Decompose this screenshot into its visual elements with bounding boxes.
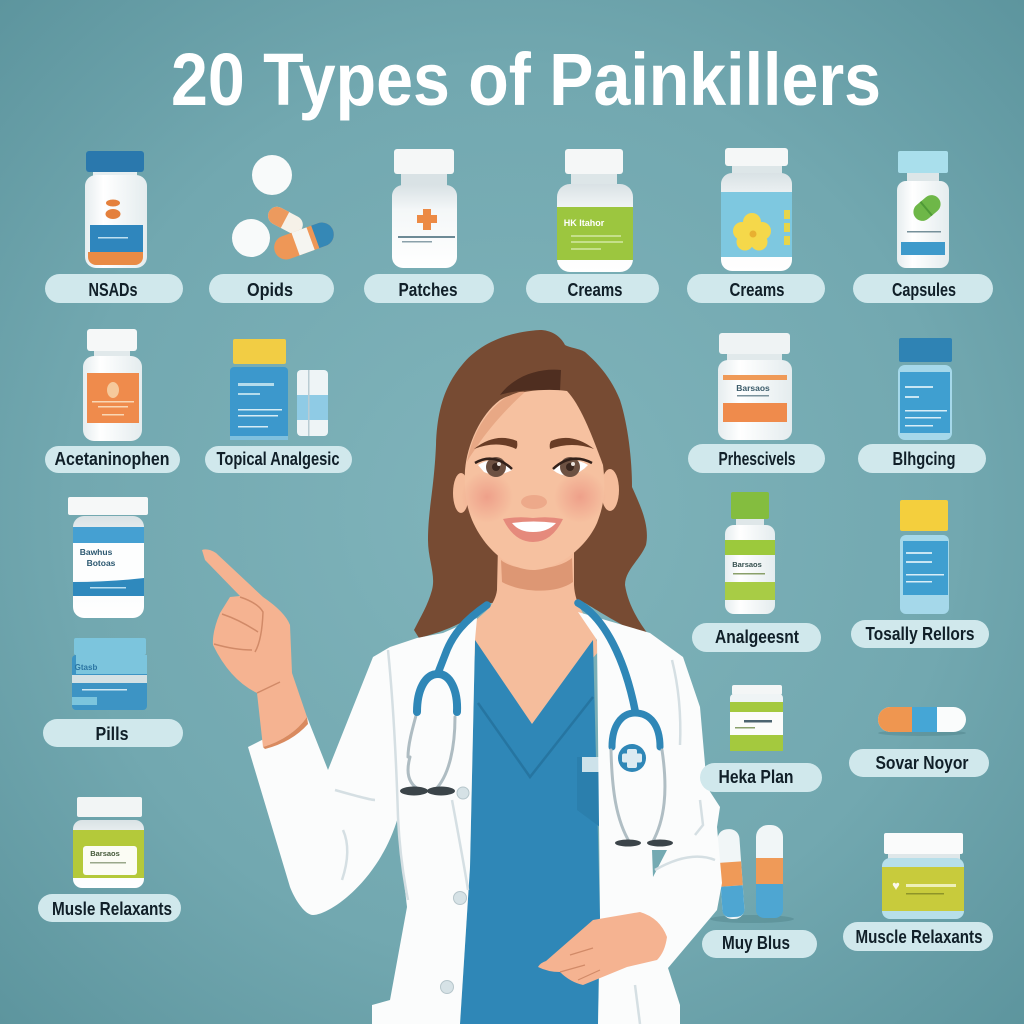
label: Topical Analgesic: Topical Analgesic xyxy=(216,449,340,469)
item: patches bottle xyxy=(392,149,457,268)
label: NSADs: NSADs xyxy=(88,280,138,300)
doctor lower hand xyxy=(538,912,667,985)
label: Analgeesnt: Analgeesnt xyxy=(715,627,799,647)
label: Sovar Noyor: Sovar Noyor xyxy=(876,753,968,773)
item: cream bottle flower xyxy=(721,148,792,271)
item: prescription bottle xyxy=(718,333,792,440)
item: cream bottle green xyxy=(557,149,633,272)
item: green cap bottle xyxy=(725,492,775,614)
item: large white-blue bottle: Bawhus xyxy=(80,547,113,557)
label: Creams 2: Creams xyxy=(730,280,784,300)
label: Pills xyxy=(43,719,183,747)
label: Sovar Noyor xyxy=(849,749,989,777)
label: Acetaminophen xyxy=(45,446,180,473)
item: muscle relaxant jar right: ♥ xyxy=(892,878,900,893)
stethoscope badge xyxy=(618,744,646,772)
coat folds xyxy=(335,650,715,1024)
stethoscope chest pieces xyxy=(400,786,673,846)
doctor forehead shadow xyxy=(467,392,525,462)
label: Creams 1 xyxy=(526,274,659,303)
doctor coat left xyxy=(248,618,477,1024)
label: Musle Relaxants left xyxy=(38,894,181,922)
label: Prhescivels: Prhescivels xyxy=(718,449,796,469)
illustration: doctor xyxy=(202,330,722,1024)
doctor scrub pocket xyxy=(577,757,600,827)
doctor nose xyxy=(521,495,547,509)
item: large white-blue bottle: Botoas xyxy=(87,558,116,568)
item: small green jar xyxy=(730,685,783,751)
doctor mouth xyxy=(503,517,563,542)
doctor ears xyxy=(453,469,619,513)
label: Patches: Patches xyxy=(398,280,458,300)
label: Topical Analgesic xyxy=(205,446,352,473)
label: Pills: Pills xyxy=(96,724,128,744)
item: capsule bottle xyxy=(897,151,949,268)
item: small vials xyxy=(710,825,794,923)
label: Heka Plan xyxy=(700,763,822,792)
item: muscle relaxant jar right xyxy=(882,833,964,919)
doctor hair part shadow xyxy=(500,370,561,395)
label: Blhgcing: Blhgcing xyxy=(892,449,956,469)
doctor cheeks xyxy=(461,471,606,523)
doctor buttons xyxy=(440,787,469,994)
item: blue cap bottle xyxy=(898,338,952,440)
label: Patches xyxy=(364,274,494,303)
item: pills jar xyxy=(72,638,147,710)
label: Analgeesnt xyxy=(692,623,821,652)
label: Acetaminophen: Acetaninophen xyxy=(54,449,170,469)
label: Opids: Opids xyxy=(247,280,293,300)
label: Muy Blus: Muy Blus xyxy=(722,933,790,953)
label: Opids xyxy=(209,274,334,303)
item: large white-blue bottle xyxy=(68,497,148,618)
coat gap xyxy=(652,850,667,877)
label: Prhescivels xyxy=(688,444,825,473)
doctor collar seam xyxy=(478,697,593,777)
doctor raised hand xyxy=(202,549,308,749)
item: muscle relaxant jar left: Barsaos xyxy=(90,849,120,858)
item: yellow cap bottle xyxy=(900,500,949,614)
doctor brows xyxy=(474,438,594,449)
label: Capsules xyxy=(853,274,993,303)
doctor chin shadow xyxy=(501,558,573,591)
item: cream bottle green: HK Itahor xyxy=(564,218,605,228)
item: acetaminophen bottle xyxy=(83,329,142,441)
label: Muscle Relaxants right xyxy=(843,922,993,951)
label: Creams 2 xyxy=(687,274,825,303)
item: capsule xyxy=(878,707,966,736)
label: Muscle Relaxants right: Muscle Relaxants xyxy=(856,927,982,947)
item: green cap bottle: Barsaos xyxy=(732,560,762,569)
label: Capsules: Capsules xyxy=(892,280,956,300)
doctor scrubs xyxy=(460,640,600,1024)
item: muscle relaxant jar left xyxy=(73,797,144,888)
doctor coat right xyxy=(578,612,722,1024)
label: Muy Blus xyxy=(702,930,817,958)
doctor neck xyxy=(470,545,600,726)
item: pills jar: Gtasb xyxy=(75,663,97,672)
item: topical analgesic box xyxy=(230,339,328,440)
stethoscope xyxy=(408,603,665,843)
doctor hair xyxy=(414,330,653,640)
label: Tosally Rellors xyxy=(851,620,989,648)
item: NSAIDs bottle xyxy=(85,151,147,268)
label: Heka Plan: Heka Plan xyxy=(718,767,794,787)
doctor eyes xyxy=(475,457,592,477)
label: NSADs xyxy=(45,274,183,303)
label: Creams 1: Creams xyxy=(568,280,622,300)
label: Blhgcing xyxy=(858,444,986,473)
doctor face xyxy=(465,390,604,570)
label: Musle Relaxants left: Musle Relaxants xyxy=(52,899,172,919)
title: 20 Types of Painkillers xyxy=(171,38,881,121)
label: Tosally Rellors: Tosally Rellors xyxy=(866,624,974,644)
item: prescription bottle: Barsaos xyxy=(736,383,770,393)
item: opioid pills xyxy=(232,155,337,263)
